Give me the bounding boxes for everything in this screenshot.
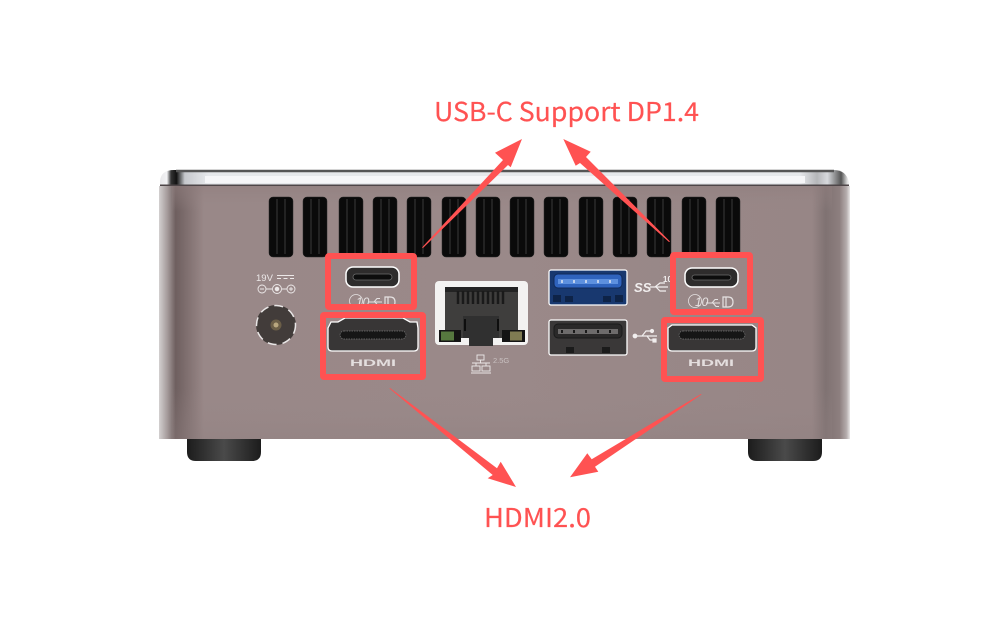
- HDMI port left: HDMI: [350, 358, 396, 368]
- USB 3 port: [549, 270, 627, 305]
- ventilation slots: [269, 197, 740, 257]
- USB 3 SuperSpeed logo: SS: [634, 280, 652, 295]
- highlight box: left HDMI: [323, 315, 423, 377]
- rubber foot: right: [748, 438, 822, 461]
- label: HDMI2.0: HDMI2.0: [484, 498, 591, 535]
- RJ45 ethernet port: [435, 281, 528, 346]
- power jack: [256, 305, 296, 345]
- USB 3 SuperSpeed logo: [634, 275, 672, 295]
- ethernet 2.5G label: 2.5G: [493, 356, 509, 365]
- highlight box: left USB-C: [328, 256, 414, 307]
- USB-C port right: [685, 268, 738, 309]
- USB 2 port: [549, 320, 627, 355]
- HDMI port right: HDMI: [688, 358, 734, 368]
- label: USB-C Support DP1.4: USB-C Support DP1.4: [434, 92, 699, 129]
- USB-C port left: [346, 267, 399, 309]
- arrow: right HDMI to label: [570, 394, 702, 477]
- USB-C port right: 10: [695, 295, 709, 309]
- highlight box: right USB-C: [673, 255, 750, 312]
- USB-C port left: 10: [356, 295, 370, 309]
- arrow: left HDMI to label: [390, 388, 516, 487]
- rubber foot: left: [187, 438, 261, 461]
- silver top lid: [160, 170, 849, 186]
- mini PC device: [159, 170, 850, 461]
- power input label: [256, 273, 295, 294]
- USB 3 SuperSpeed logo: 10: [663, 275, 672, 284]
- highlight box: right HDMI: [664, 320, 761, 379]
- HDMI port left: [328, 318, 418, 368]
- metal chassis rear panel: [159, 186, 850, 439]
- HDMI port right: [668, 325, 756, 368]
- USB 2 logo: [633, 330, 657, 342]
- arrow: right USB-C to label: [563, 139, 670, 242]
- arrow: left USB-C to label: [422, 139, 522, 248]
- power input label: 19V: [256, 273, 274, 284]
- ethernet 2.5G label: [471, 355, 509, 373]
